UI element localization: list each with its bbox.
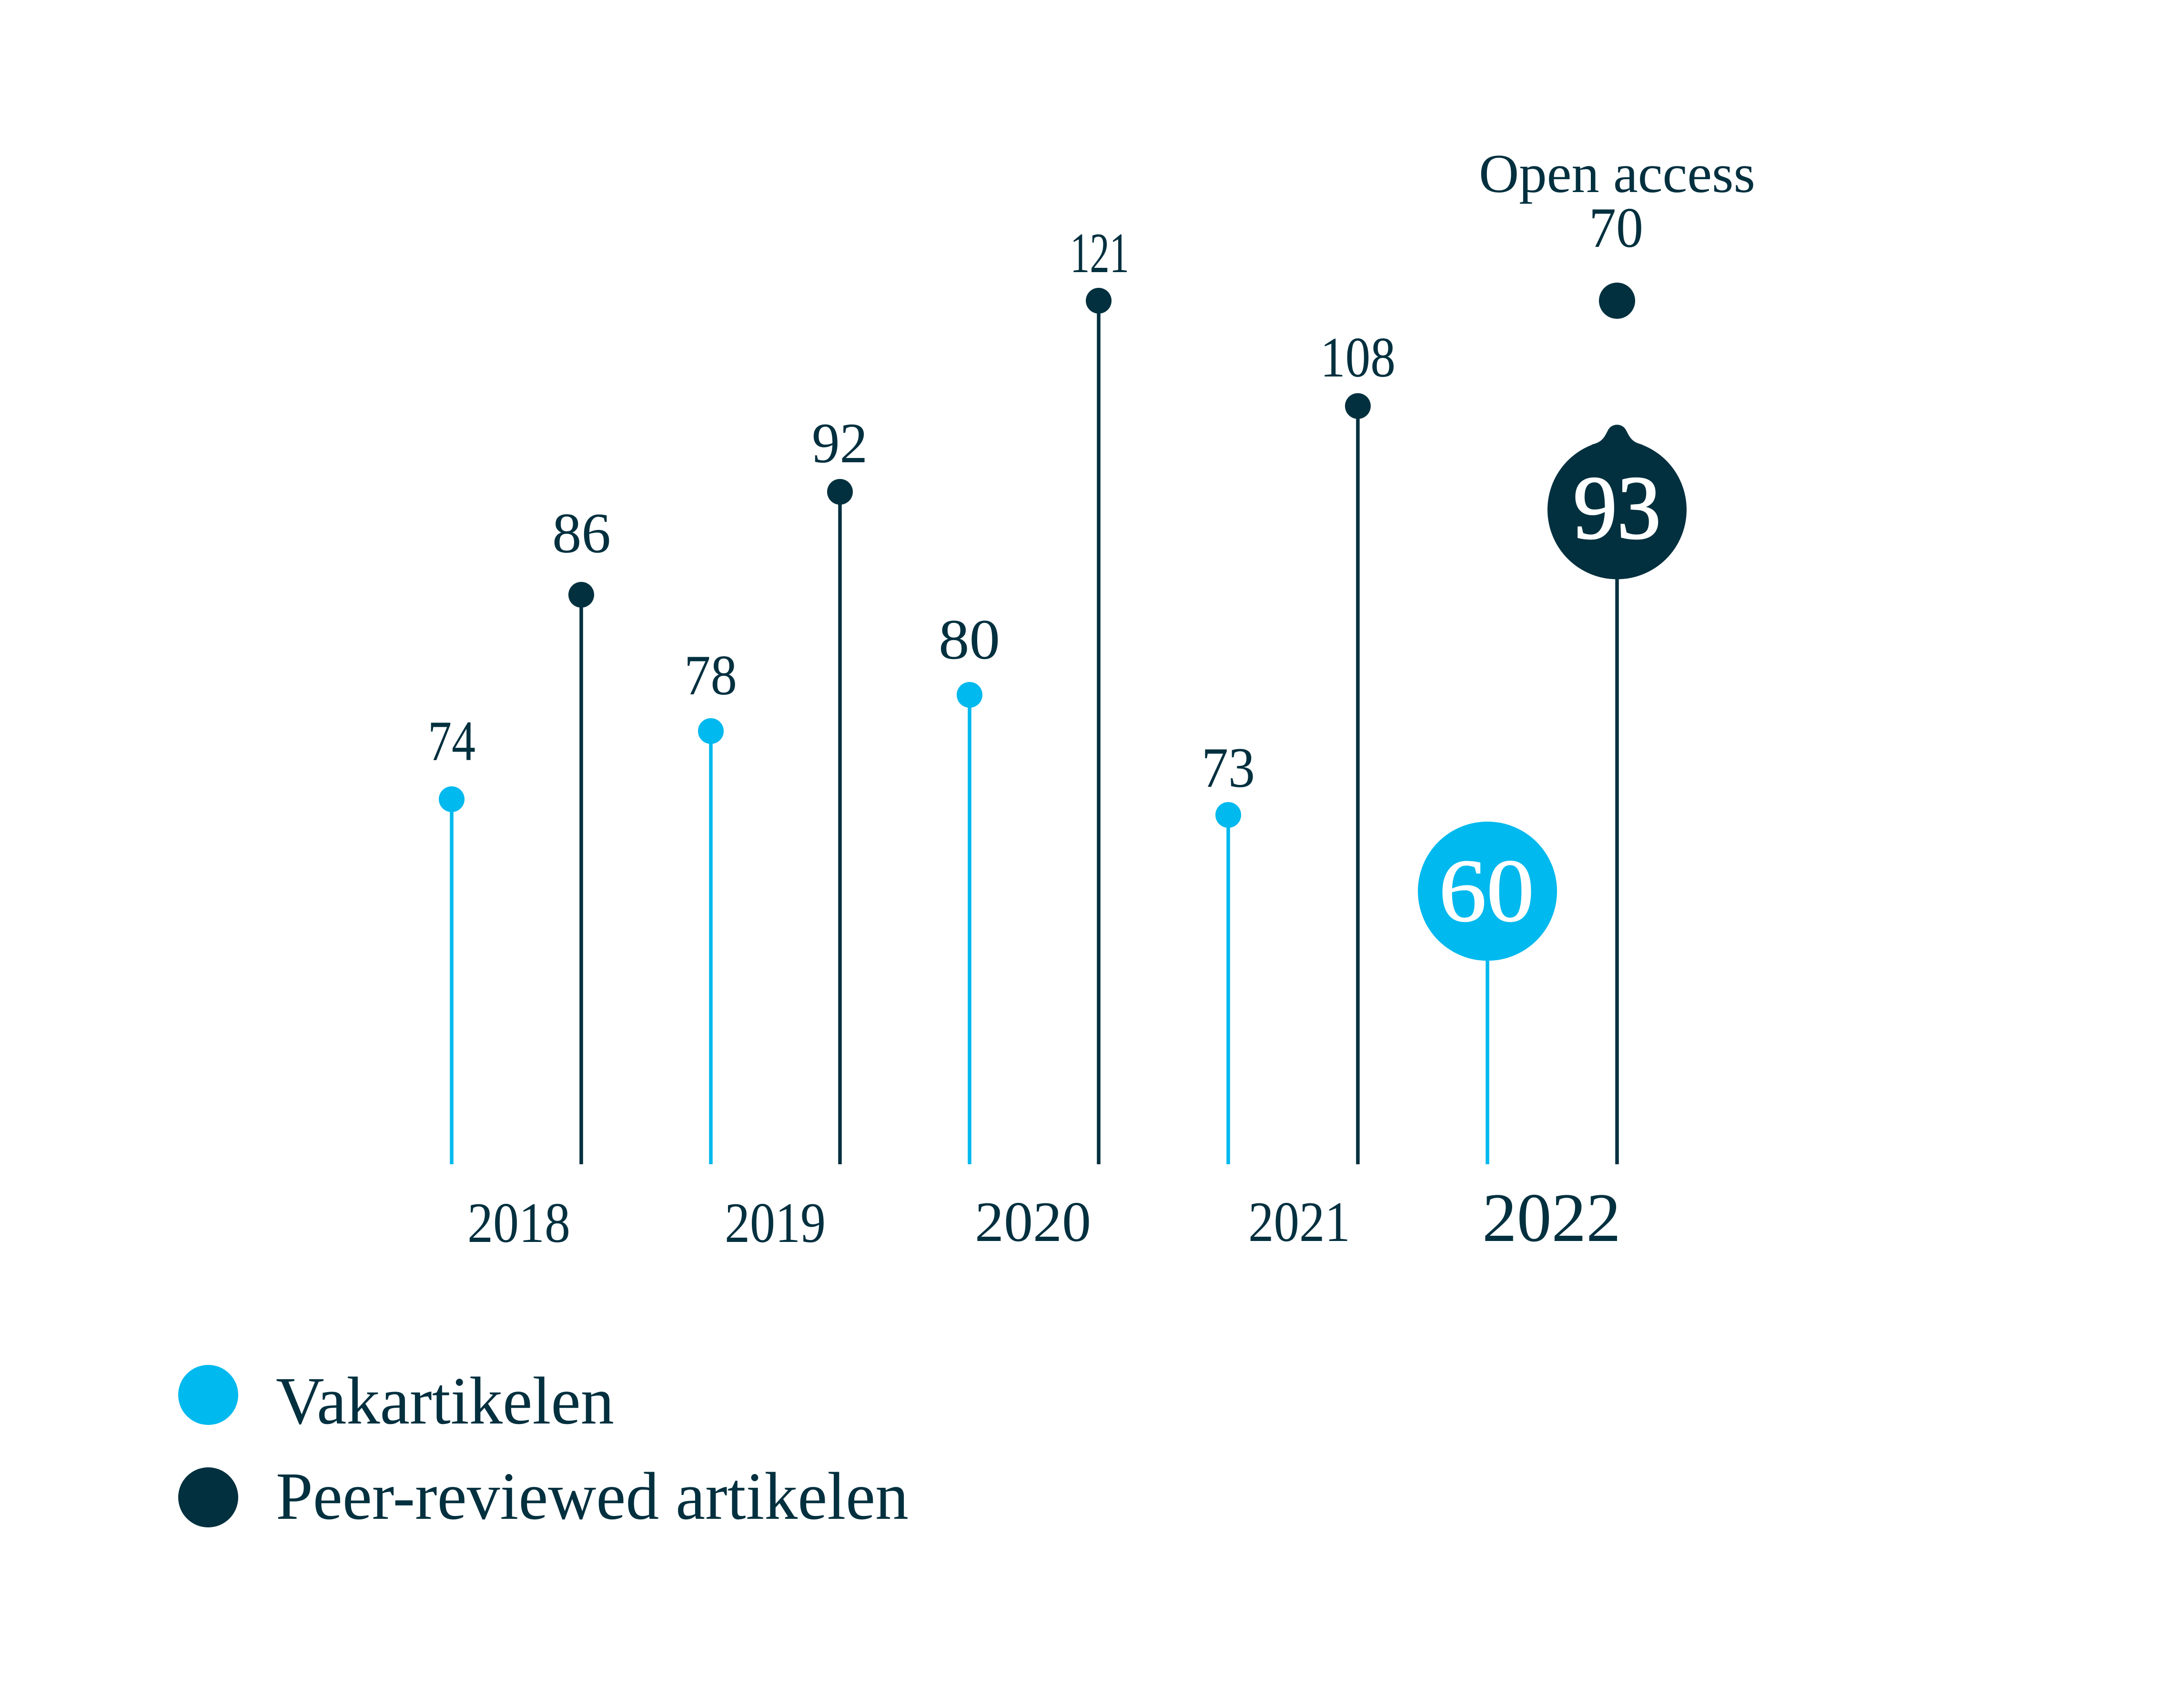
series 2019 vakartikelen: 78: [684, 643, 737, 1164]
year axis labels: [467, 1179, 1621, 1256]
series 2018 peer-reviewed: 86: 86: [552, 501, 611, 565]
series 2018 vakartikelen: 74: [428, 709, 475, 1164]
series 2022 peer-reviewed: 93: 93: [1573, 458, 1661, 558]
series 2022 vakartikelen: 60: [1418, 822, 1557, 1164]
series 2018 vakartikelen: 74: 74: [428, 709, 475, 773]
series 2019 vakartikelen: 78: 78: [684, 643, 737, 707]
series 2021 vakartikelen: 73: [1202, 736, 1255, 1164]
open access marker: 70: 70: [1589, 196, 1643, 259]
series 2019 peer-reviewed: 92: 92: [812, 411, 868, 475]
open access marker: 70: [1479, 143, 1755, 319]
year axis labels: 2019: [725, 1191, 826, 1254]
series 2020 peer-reviewed: 121: 121: [1070, 221, 1129, 285]
legend: [178, 1363, 909, 1534]
lollipop chart: [428, 143, 1755, 1164]
year axis labels: 2021: [1248, 1190, 1350, 1253]
year axis labels: 2022: [1482, 1179, 1621, 1256]
open access marker: 70: Open access: [1479, 143, 1755, 204]
series 2022 vakartikelen: 60: 60: [1439, 841, 1534, 940]
series 2020 vakartikelen: 80: 80: [939, 608, 1000, 671]
series 2021 peer-reviewed: 108: [1320, 325, 1395, 1164]
series 2022 peer-reviewed: 93: [1547, 425, 1687, 1164]
series 2021 peer-reviewed: 108: 108: [1320, 325, 1395, 389]
series 2019 peer-reviewed: 92: [812, 411, 868, 1164]
series 2018 peer-reviewed: 86: [552, 501, 611, 1164]
series 2020 vakartikelen: 80: [939, 608, 1000, 1164]
year axis labels: 2020: [975, 1190, 1091, 1253]
legend item: vakartikelen: Vakartikelen: [276, 1363, 614, 1438]
year axis labels: 2018: [467, 1191, 570, 1254]
legend item: peer-reviewed artikelen: Peer-reviewed artikelen: [276, 1458, 909, 1534]
series 2021 vakartikelen: 73: 73: [1202, 736, 1255, 799]
series 2020 peer-reviewed: 121: [1070, 221, 1129, 1164]
